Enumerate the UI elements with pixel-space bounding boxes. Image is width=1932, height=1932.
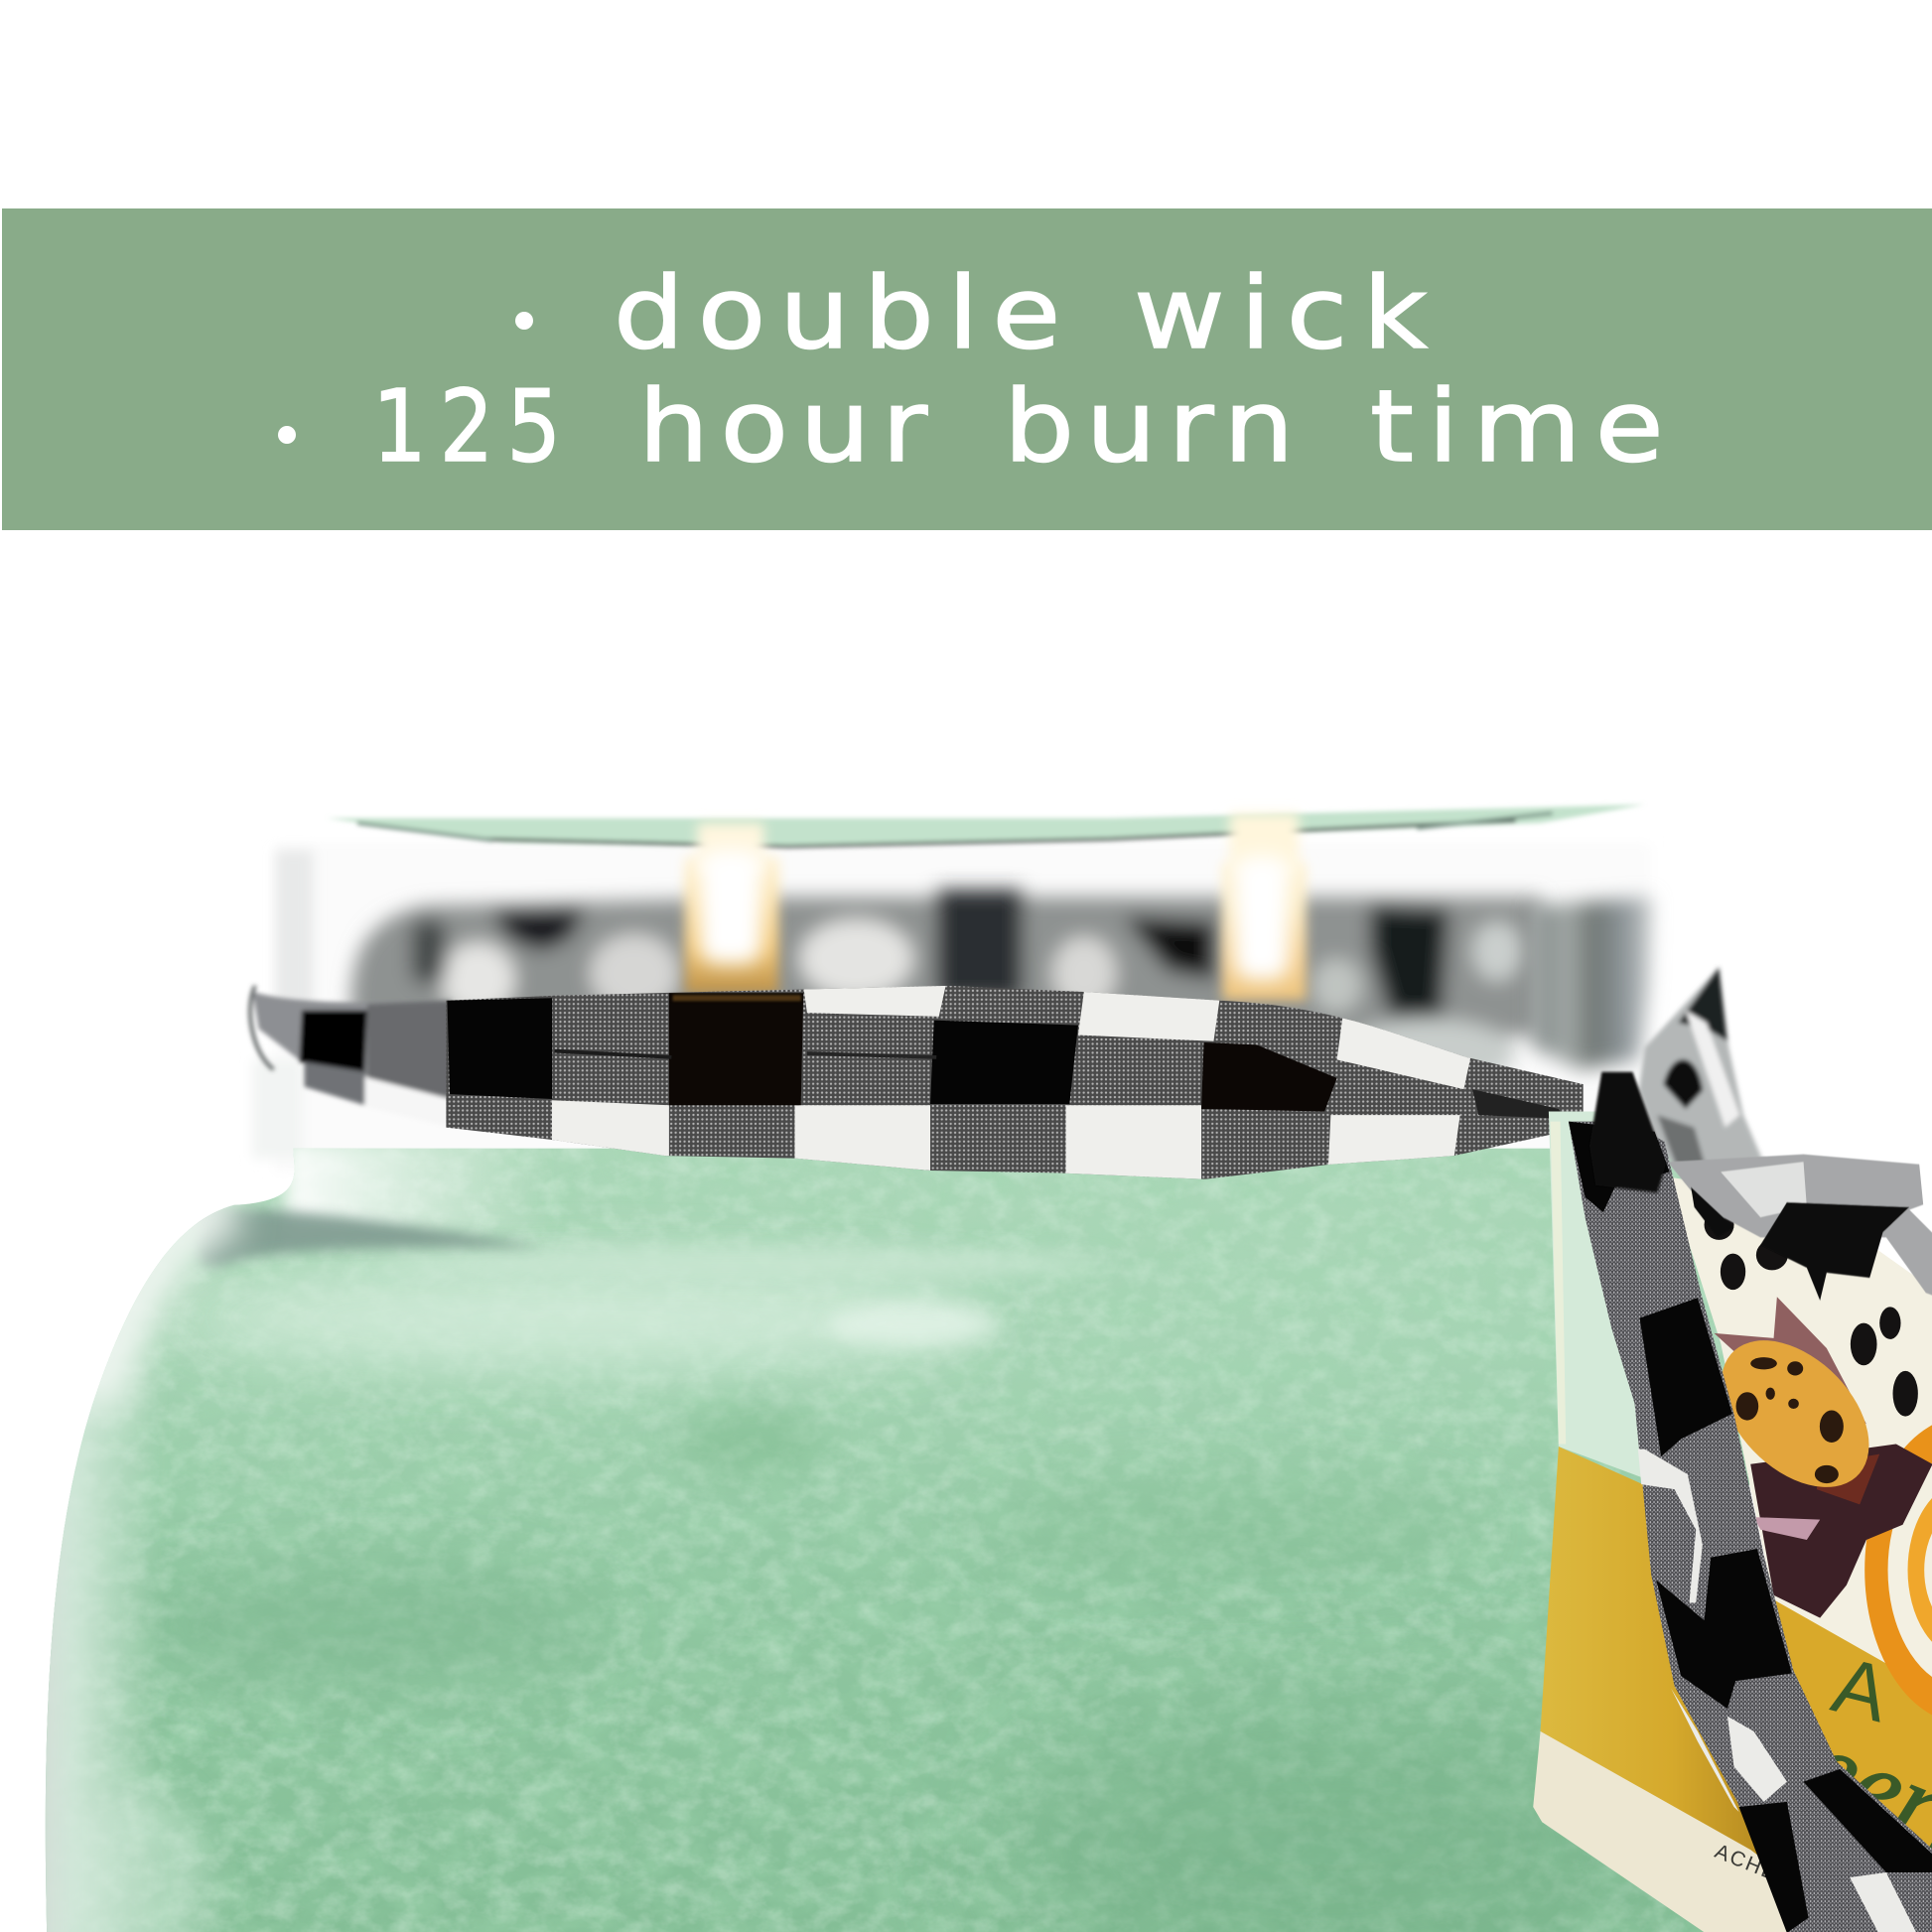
ribbon black squares — [1569, 1122, 1932, 1932]
tag text — [1712, 1640, 1932, 1885]
ribbon white fringes — [1638, 1449, 1916, 1932]
line 2: 125 hour burn time: time — [1370, 369, 1664, 484]
wax highlights and shadows — [37, 1140, 1651, 1932]
line 2: 125 hour burn time — [278, 368, 1664, 484]
line 2: 125 hour burn time: hour — [638, 369, 928, 484]
photo: candle jar — [37, 804, 1932, 1932]
tag: cream edge — [1533, 1731, 1787, 1932]
hang tag, back card — [1533, 1112, 1787, 1932]
glass neck of the jar — [252, 843, 1651, 1173]
rim of the jar with green wax seen through — [327, 804, 1645, 848]
hanging ribbon over the tag — [1569, 1122, 1932, 1932]
muffin — [1708, 1297, 1932, 1618]
line 2: 125 hour burn time: burn — [1004, 369, 1294, 484]
line 2: 125 hour burn time: 125 — [372, 368, 561, 484]
gingham ribbon around the neck — [446, 986, 1584, 1179]
flame: right wick — [1222, 813, 1307, 1001]
label background — [1673, 1177, 1932, 1677]
orange slice — [1876, 1434, 1932, 1706]
knot of the ribbon — [1589, 1072, 1666, 1192]
line 1: double wick — [515, 256, 1428, 371]
tag: yellow band — [1541, 1447, 1757, 1855]
flame: left wick — [685, 823, 778, 995]
blurred left end of the ribbon — [250, 986, 451, 1128]
front label with polka dots and muffin — [1673, 1177, 1932, 1847]
tag: mint panel — [1549, 1112, 1640, 1477]
reflections of the ribbon in the glass — [351, 890, 1540, 1088]
label yellow field — [1770, 1597, 1932, 1932]
tag text: A — [1825, 1640, 1898, 1738]
wax body of the candle — [37, 1140, 1762, 1932]
line 1: double wick: double — [614, 256, 1060, 371]
lower bow over the label — [1668, 1155, 1932, 1303]
black squares — [448, 993, 1565, 1119]
tag: pale card edge — [1551, 1122, 1566, 1444]
line 1: double wick: wick — [1134, 256, 1428, 371]
white squares — [552, 983, 1471, 1181]
banner: product features — [2, 208, 1932, 530]
bow behind the knot — [1639, 967, 1764, 1182]
polka dots — [1705, 1209, 1918, 1417]
tag text: ACHE — [1712, 1840, 1781, 1885]
